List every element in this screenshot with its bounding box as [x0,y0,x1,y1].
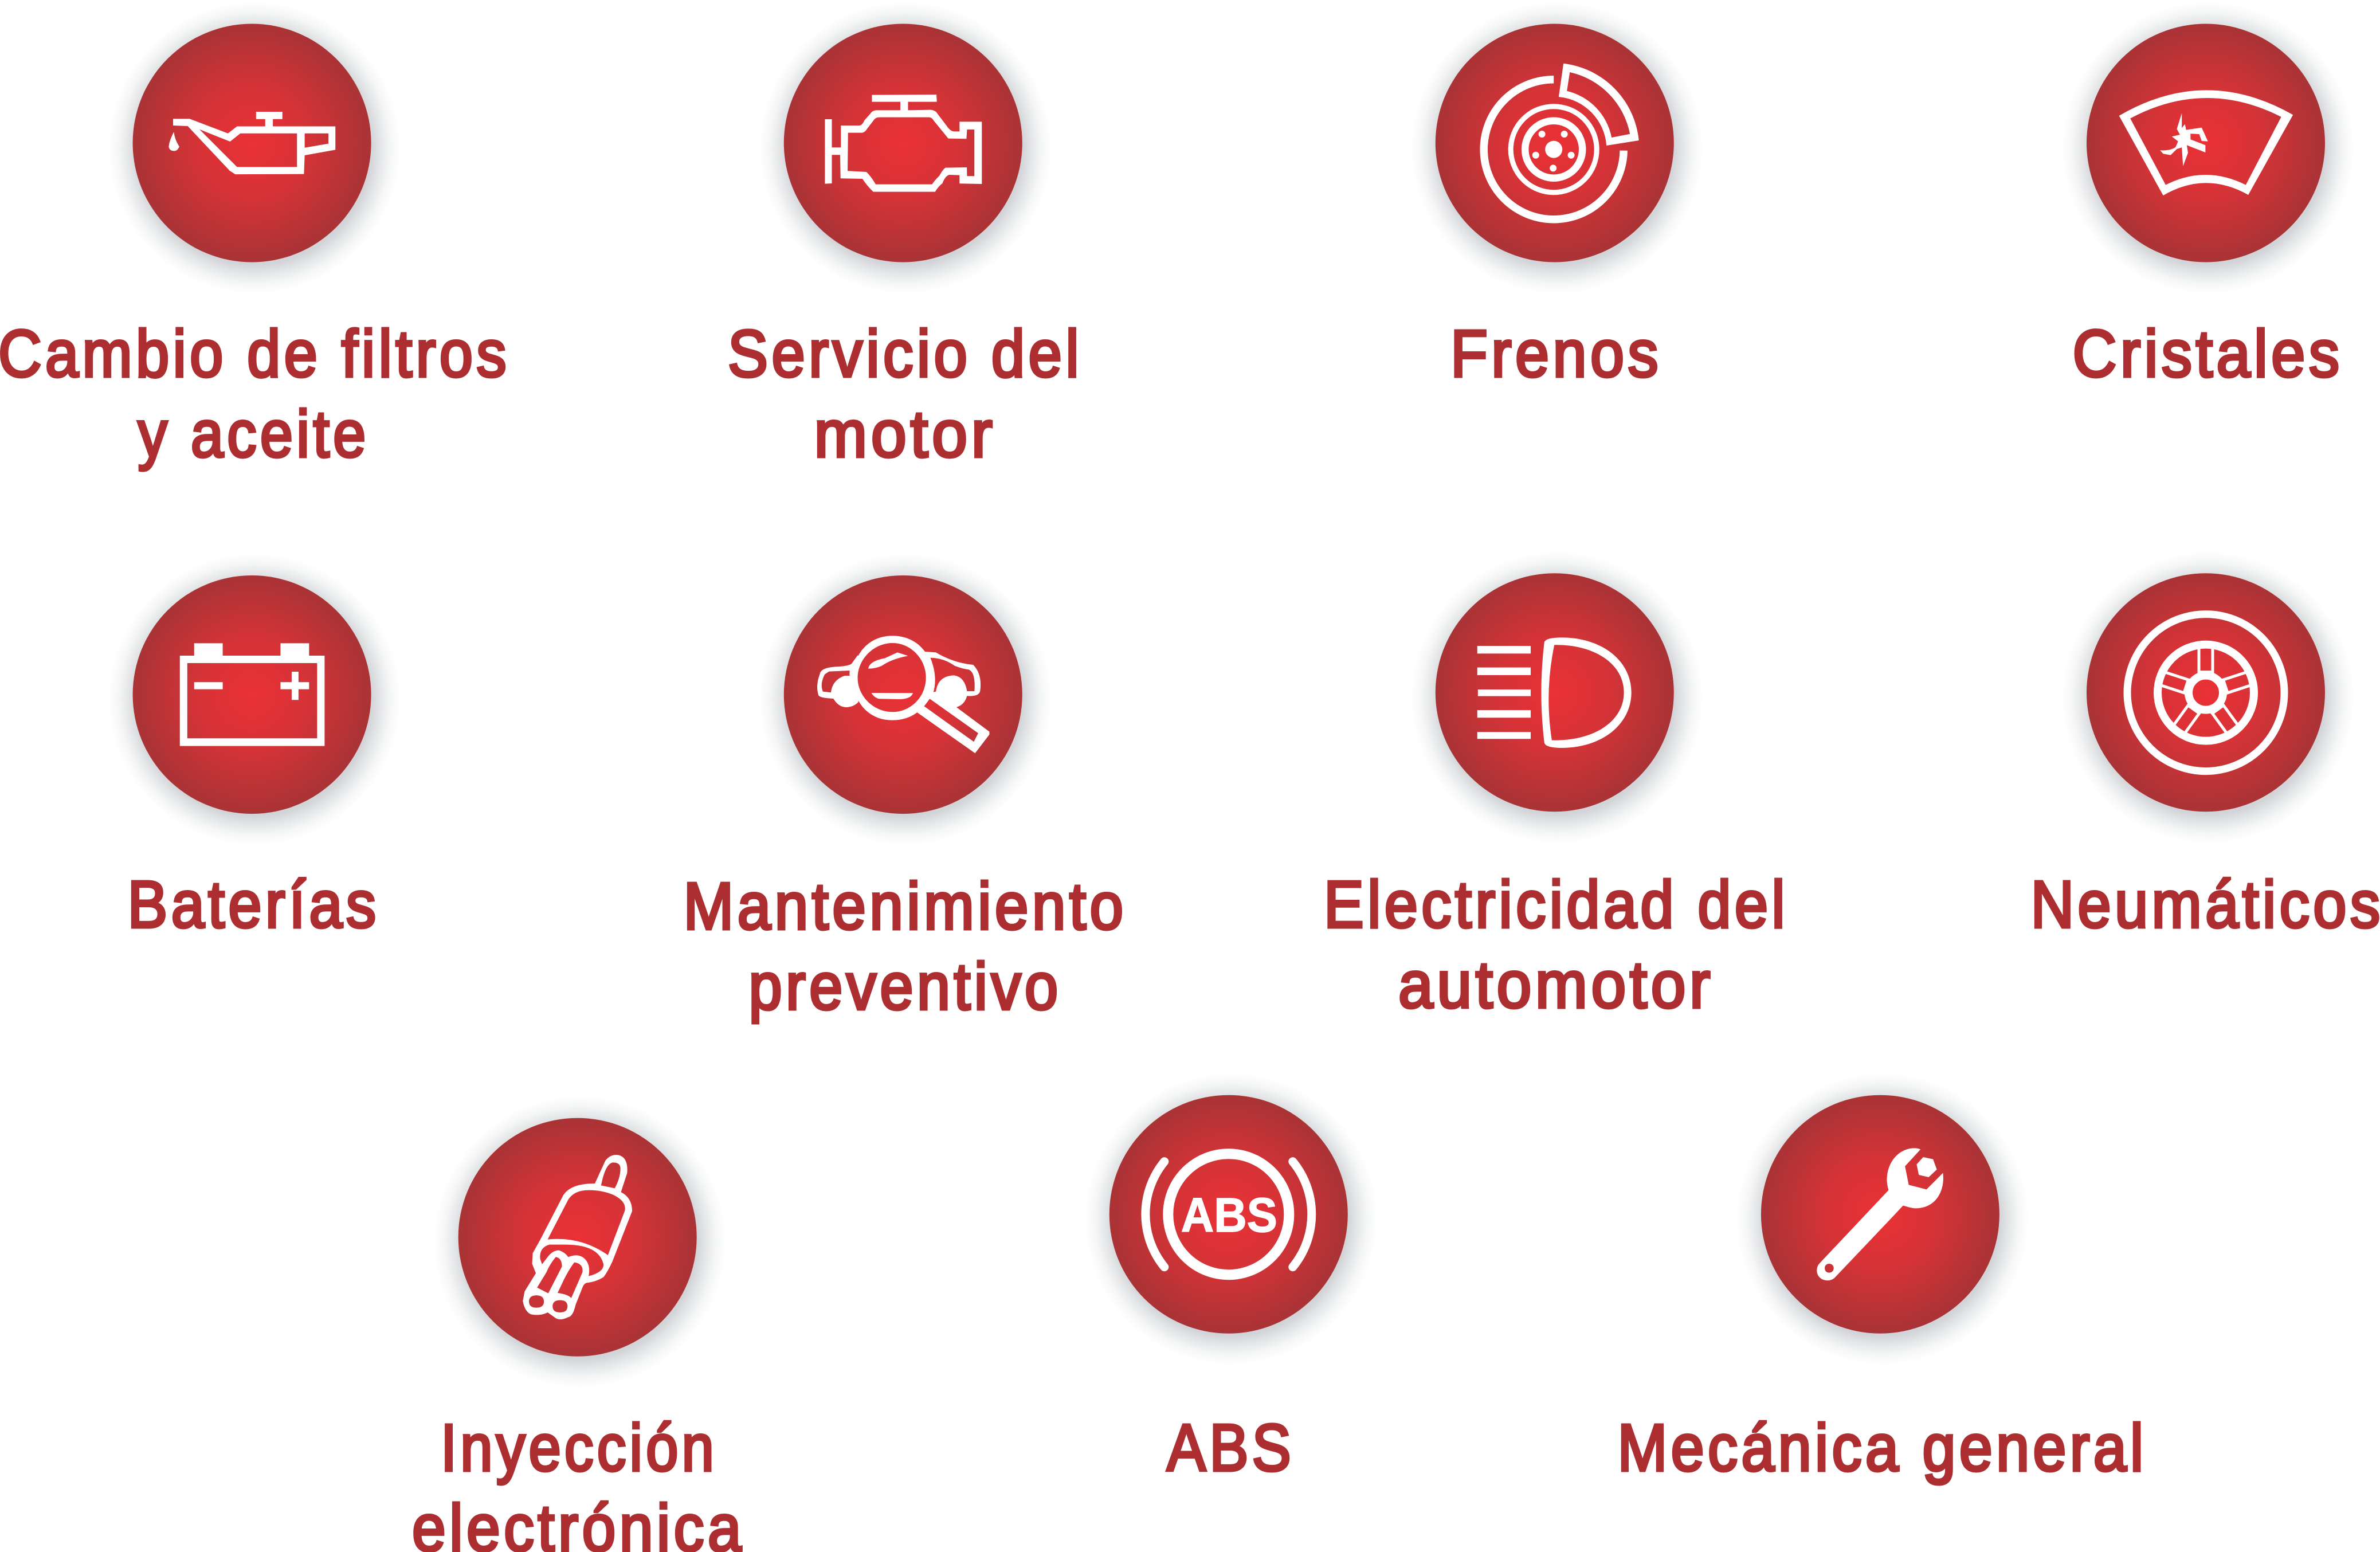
icon: brake disc [1484,64,1639,220]
icon: headlight [1477,637,1632,748]
panel: ABS [1085,1073,1377,1485]
badge: general mechanics [1736,1073,2029,1365]
panel: Mecánica general [1617,1073,2147,1485]
label: Mantenimiento preventivo: preventivo [748,949,1061,1024]
panel: Baterías [108,553,401,942]
icon: car under magnifying glass [817,636,989,753]
badge: oil [108,2,401,294]
label: Mantenimiento preventivo: Mantenimiento [683,869,1127,943]
panel: Cristales [2062,2,2354,391]
icon: oil can [168,112,335,174]
badge: injection [434,1096,726,1388]
label: Cambio de filtros y aceite [0,316,510,471]
panel: Cambio de filtros y aceite [0,2,510,471]
badge: engine [759,2,1052,294]
panel: Neumáticos [2031,551,2380,942]
icon: battery [180,643,324,746]
badge: ABS [1085,1073,1377,1365]
label: Cristales: Cristales [2072,316,2343,391]
label: Servicio del motor [728,316,1083,471]
badge: electricity [1411,551,1703,844]
label: Cambio de filtros y aceite: Cambio de filtros [0,316,510,391]
badge: preventive maintenance [759,553,1052,845]
label: Electricidad del automotor: Electricidad del [1324,867,1789,942]
panel: Inyección electrónica [412,1096,745,1552]
badge: battery [108,553,401,845]
icon: ABS warning symbol: ABS [1181,1188,1277,1242]
label: Electricidad del automotor [1324,867,1789,1022]
panel: Servicio del motor [728,2,1083,471]
icon: engine [825,95,982,192]
label: Servicio del motor: motor [814,397,996,471]
label: Baterías: Baterías [127,867,379,942]
label: Mecánica general: Mecánica general [1617,1410,2147,1485]
icon: exhaust muffler [523,1155,632,1319]
label: Electricidad del automotor: automotor [1398,947,1714,1022]
badge: glass [2062,2,2354,294]
label: Inyección electrónica [412,1410,745,1552]
label: Mantenimiento preventivo [683,869,1127,1024]
badge: tyres [2062,551,2354,844]
icon: wrench and nut [1817,1148,1943,1280]
label: Frenos: Frenos [1450,316,1662,391]
label: ABS: ABS [1167,1410,1295,1485]
icon: tyre and rim [2127,614,2284,771]
label: Inyección electrónica: Inyección [441,1410,717,1485]
panel: Mantenimiento preventivo [683,553,1127,1024]
icon: cracked windshield [2119,90,2293,195]
label: Cambio de filtros y aceite: y aceite [138,397,369,471]
badge: brakes [1411,2,1703,294]
panel: Electricidad del automotor [1324,551,1789,1022]
label: Servicio del motor: Servicio del [728,316,1083,391]
panel: Frenos [1411,2,1703,391]
icon: ABS warning symbol [1146,1154,1312,1275]
